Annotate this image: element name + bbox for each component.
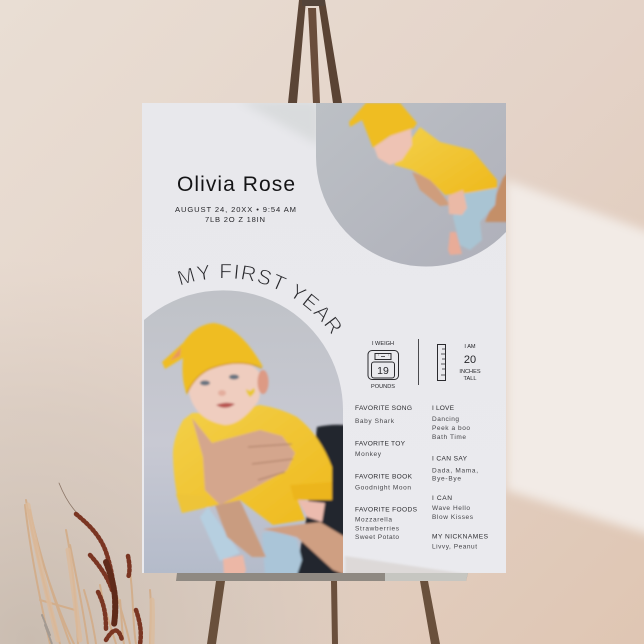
birth date and time: AUGUST 24, 20XX • 9:54 AM [175,205,296,214]
right leg [262,530,302,575]
leg [453,185,497,250]
list: favorites: Baby Shark [355,418,395,425]
list: favorites: Mozzarella [355,516,392,524]
photo: baby held up in arch [144,285,345,575]
list: milestones: I LOVE [432,405,455,412]
mouth [216,403,235,408]
eyes [200,380,210,386]
height stat: TALL [464,376,476,382]
divider [418,339,419,385]
list: favorites: Monkey [355,451,382,458]
holding hand [484,173,506,224]
height stat: 20 [464,354,476,366]
easel lower legs [207,581,440,644]
icon: ruler [438,344,446,380]
list: milestones: Wave Hello [432,505,470,512]
weight stat: POUNDS [371,384,395,390]
list: milestones: I CAN SAY [432,456,468,462]
face [374,127,412,165]
supporting arm [215,500,266,557]
list: milestones [432,405,489,550]
list: milestones: Bye-Bye [432,476,461,482]
sweater [394,127,497,195]
list: milestones: I CAN [432,495,452,502]
weight stat: 19 [377,365,389,377]
ear [258,370,268,394]
dark clothing behind baby [295,425,345,575]
photo: baby lying in round frame [316,103,510,268]
curved title: MY FIRST YEAR [178,264,341,334]
poster board [142,100,506,576]
list: milestones: Dancing [432,416,459,423]
nose [218,390,226,396]
list: favorites: FAVORITE FOODS [355,506,418,514]
holding arm [412,172,450,206]
lower forearm [263,522,345,575]
weight stat [368,341,398,390]
baby's hand [448,190,467,215]
list: favorites: Sweet Potato [355,534,399,541]
hat [162,323,263,395]
list: favorites: Goodnight Moon [355,484,411,492]
easel upper legs [288,0,342,103]
name heading: Olivia Rose [177,173,295,196]
list: milestones: Livvy, Peanut [432,544,477,550]
easel tray [176,573,468,581]
height stat [438,344,481,382]
list: favorites: FAVORITE TOY [355,440,406,448]
face [189,360,260,425]
height stat: INCHES [459,369,481,375]
list: milestones: Blow Kisses [432,514,474,521]
hat [349,103,417,148]
foot [448,232,462,255]
heart on cheek [246,388,255,397]
list: favorites: FAVORITE SONG [355,405,412,412]
list: milestones: Peek a boo [432,425,470,432]
baby's small hand [298,500,325,522]
list: milestones: Bath Time [432,434,466,441]
dried plant [25,483,152,644]
sweater [173,405,332,525]
hand [192,418,295,505]
list: milestones: MY NICKNAMES [432,534,489,540]
list: favorites [355,405,418,541]
birth weight and length: 7LB 2O Z 18IN [205,215,265,224]
height stat: I AM [464,344,476,350]
list: favorites: FAVORITE BOOK [355,474,413,480]
list: milestones: Dada, Mama, [432,468,478,474]
icon: scale [368,350,398,380]
list: favorites: Strawberries [355,526,400,532]
left leg [200,507,240,561]
weight stat: I WEIGH [372,341,394,347]
